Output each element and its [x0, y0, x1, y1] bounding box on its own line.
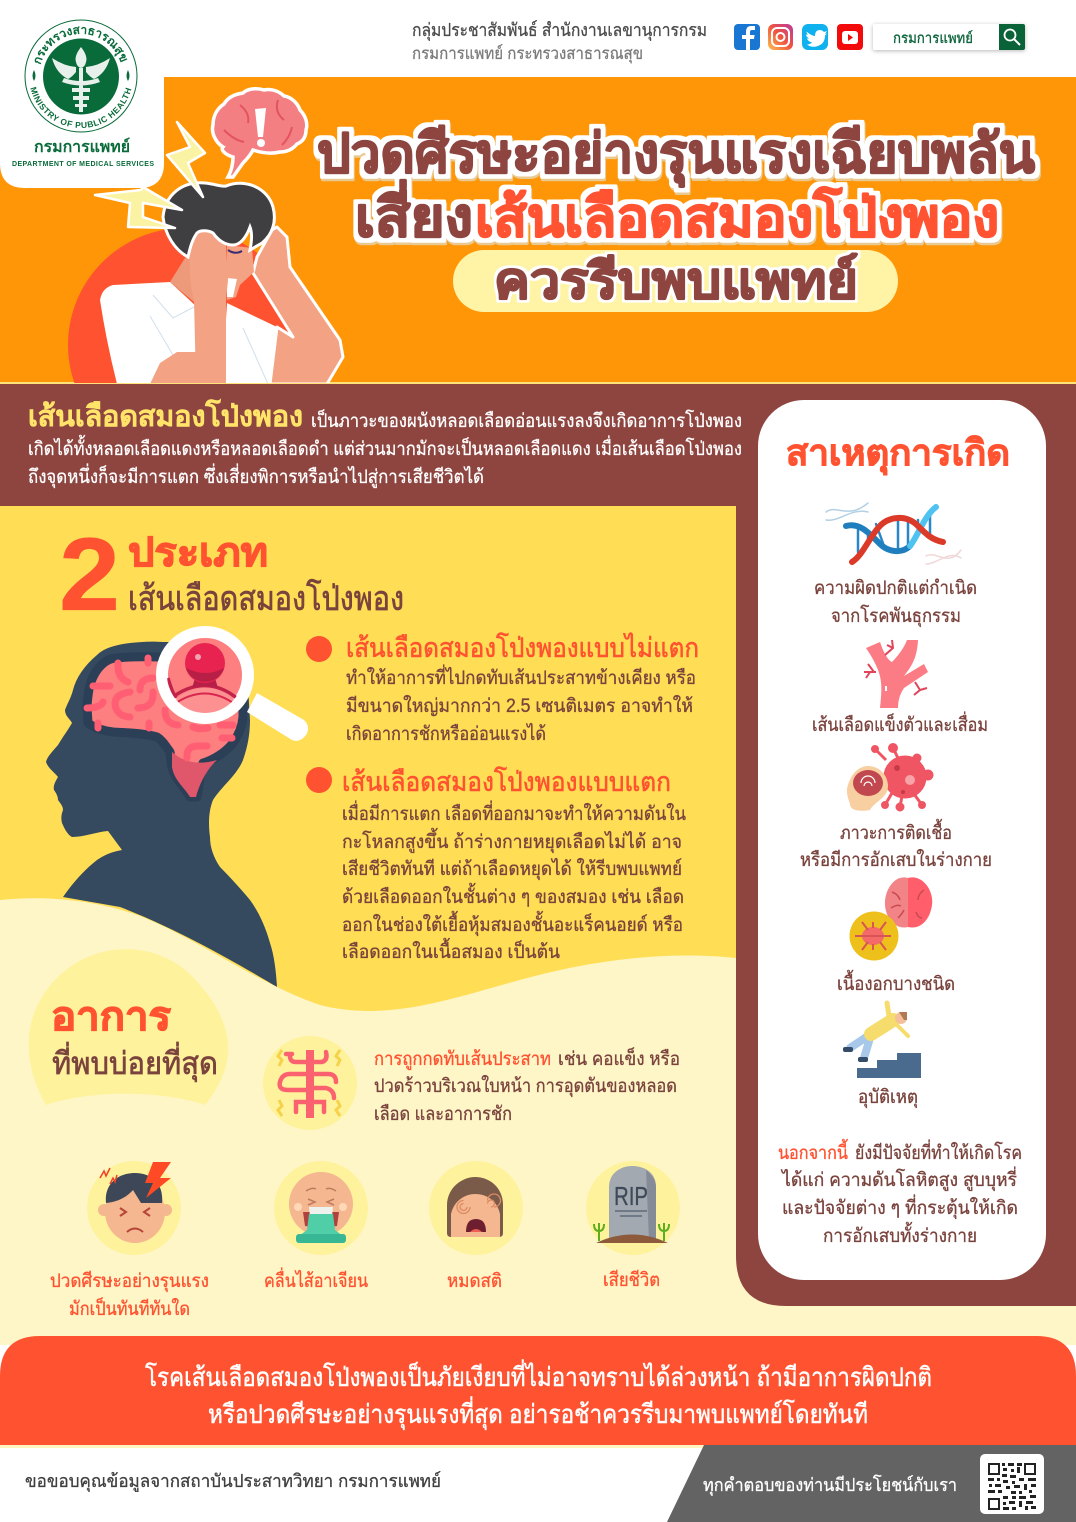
panel: brown causes background	[736, 500, 1076, 1306]
symptom: severe headache: มักเป็นทันทีทันใด	[69, 1296, 190, 1320]
title: เสี่ยง	[355, 179, 473, 248]
header text: กลุ่มประชาสัมพันธ์ สำนักงานเลขานุการกรม	[412, 20, 707, 41]
panel: brown heading band	[0, 384, 1076, 506]
header text: กรมการแพทย์ กระทรวงสาธารณสุข	[412, 44, 643, 64]
head silhouette	[46, 642, 277, 987]
symptom: loss of consciousness	[429, 1161, 523, 1292]
bullet: unruptured aneurysm: เกิดอาการชักหรืออ่อนแรงได้	[346, 723, 546, 745]
bullet: ruptured aneurysm: เสียชีวิตทันที แต่ถ้าเลือดหยุดได้ ให้รีบพบแพทย์	[342, 858, 682, 881]
label: accident: อุบัติเหตุ	[858, 1087, 918, 1109]
logo seal	[24, 20, 138, 132]
icon: facebook	[734, 24, 760, 50]
icon: youtube	[837, 24, 863, 50]
label: เสียชีวิต	[603, 1269, 660, 1291]
definition text: เส้นเลือดสมองโป่งพอง	[28, 398, 303, 433]
heading: 2 types: เส้นเลือดสมองโป่งพอง	[128, 579, 404, 618]
icon: artery	[864, 640, 928, 708]
bullet: unruptured aneurysm	[306, 633, 699, 745]
left arm and hand	[190, 231, 228, 384]
logo seal: MINISTRY OF PUBLIC HEALTH	[30, 86, 132, 128]
callout: warning band: โรคเส้นเลือดสมองโป่งพองเป็นภัยเงียบที่ไม่อาจทราบได้ล่วงหน้า ถ้ามีอาการผิดปกติ	[145, 1359, 932, 1392]
symptom: nausea and vomiting	[264, 1161, 368, 1292]
brain folds	[87, 658, 233, 758]
magnifier ring	[162, 632, 248, 718]
aneurysm in lens	[167, 643, 237, 713]
text: other factors: การอักเสบทั้งร่างกาย	[823, 1222, 977, 1247]
text: symptom description: เช่น คอแข็ง หรือ	[558, 1046, 680, 1070]
text: symptom description: เลือด และอาการชัก	[374, 1104, 512, 1125]
illustration: person with headache	[68, 87, 344, 383]
symptom: severe headache	[50, 1161, 209, 1320]
label: hardening: เส้นเลือดแข็งตัวและเสื่อม	[812, 711, 988, 736]
label: infection: ภาวะการติดเชื้อ	[840, 819, 952, 844]
heading: 2 types: ประเภท	[128, 531, 268, 575]
red circle behind person	[68, 230, 288, 383]
bullet: ruptured aneurysm: ออกในช่องใต้เยื้อหุ้มสมองชั้นอะแร็คนอยด์ หรือ	[342, 911, 683, 937]
definition text	[28, 398, 742, 489]
title: เส้นเลือดสมองโป่งพอง	[475, 186, 999, 248]
bullet: unruptured aneurysm: มีขนาดใหญ่มากกว่า 2.5 เซนติเมตร อาจทำให้	[346, 695, 693, 717]
icon: nerve compression	[263, 1036, 357, 1130]
icon: twitter	[802, 24, 828, 50]
icon: tumour	[850, 877, 932, 960]
brain stem	[172, 752, 217, 797]
logo emblem	[52, 47, 110, 112]
heading: symptoms: ที่พบบ่อยที่สุด	[52, 1042, 218, 1083]
magnifier handle	[247, 693, 308, 741]
QR code	[980, 1454, 1044, 1514]
shirt	[100, 282, 277, 384]
search box	[873, 24, 1025, 50]
logo panel: DEPARTMENT OF MEDICAL SERVICES	[12, 161, 154, 168]
text: other factors: ยังมีปัจจัยที่ทำให้เกิดโรค	[855, 1139, 1022, 1164]
panel: yellow types section	[0, 506, 736, 1026]
illustration: head silhouette with magnifier	[46, 632, 308, 987]
header text	[412, 20, 707, 64]
callout: warning band: หรือปวดศีรษะอย่างรุนแรงที่สุด อย่ารอช้าควรรีบมาพบแพทย์โดยทันที	[208, 1396, 868, 1430]
heading: symptoms: อาการ	[51, 995, 172, 1039]
label: ปวดศีรษะอย่างรุนแรง	[50, 1270, 209, 1293]
symptom: death	[586, 1161, 680, 1291]
panel: cream symptoms section	[0, 898, 1076, 1345]
chest skin	[150, 352, 196, 383]
icon: DNA	[826, 503, 961, 564]
text: symptom description: ปวดร้าวบริเวณใบหน้า การอุดตันของหลอด	[374, 1075, 677, 1098]
title: ปวดศีรษะอย่างรุนแรงเฉียบพลัน	[317, 124, 1035, 188]
title pill	[453, 250, 898, 312]
footer: credit	[0, 1445, 706, 1492]
icon: infection	[847, 744, 933, 811]
right arm	[253, 227, 343, 384]
label: tumour: เนื้องอกบางชนิด	[837, 970, 955, 995]
panel: causes	[758, 400, 1046, 1280]
hair	[163, 183, 274, 257]
bullet: unruptured aneurysm: เส้นเลือดสมองโป่งพองแบบไม่แตก	[346, 633, 699, 663]
panel: orange hero banner	[0, 77, 1076, 384]
footer: credit: ขอขอบคุณข้อมูลจากสถาบันประสาทวิทยา กรมการแพทย์	[25, 1471, 441, 1492]
icon: vomiting	[274, 1161, 368, 1255]
icon: accident fall	[843, 1003, 921, 1078]
logo panel	[0, 20, 164, 188]
text: other factors: ได้แก่ ความดันโลหิตสูง สูบบุหรี่	[780, 1166, 1017, 1192]
neck	[170, 258, 194, 302]
bullet: ruptured aneurysm: เส้นเลือดสมองโป่งพองแบบแตก	[342, 767, 671, 797]
definition text: เกิดได้ทั้งหลอดเลือดแดงหรือหลอดเลือดดำ แต่ส่วนมากมักจะเป็นหลอดเลือดแดง เมื่อเส้นเลือดโป่งพอง	[28, 435, 742, 460]
icon: headache	[87, 1161, 181, 1255]
label: คลื่นไส้อาเจียน	[264, 1267, 368, 1292]
footer: grey survey band	[667, 1445, 1076, 1522]
logo name: กรมการแพทย์	[34, 137, 130, 156]
label: congenital: ความผิดปกติแต่กำเนิด	[814, 578, 977, 599]
bullet: unruptured aneurysm: ทำให้อาการที่ไปกดทับเส้นประสาทข้างเคียง หรือ	[346, 664, 696, 689]
brain	[87, 657, 243, 797]
heading: causes: สาเหตุการเกิด	[786, 432, 1010, 476]
definition text: เป็นภาวะของผนังหลอดเลือดอ่อนแรงลงจึงเกิดอาการโป่งพอง	[311, 408, 742, 432]
heading: 2 types	[59, 517, 404, 633]
bullet: ruptured aneurysm: เลือดออกในเนื้อสมอง เป็นต้น	[342, 938, 560, 963]
title: ควรรีบพบแพทย์	[494, 253, 858, 309]
bullet: ruptured aneurysm: กะโหลกสูงขึ้น ถ้าร่างกายหยุดเลือดไม่ได้ อาจ	[342, 828, 682, 854]
search box: กรมการแพทย์	[893, 30, 973, 47]
bullet: ruptured aneurysm: เมื่อมีการแตก เลือดที่ออกมาจะทำให้ความดันใน	[342, 800, 686, 825]
heading: symptoms	[29, 949, 228, 1105]
text: other factors: และปัจจัยต่าง ๆ ที่กระตุ้นให้เกิด	[782, 1194, 1018, 1220]
text: other factors	[778, 1139, 1022, 1247]
face	[227, 245, 254, 300]
lightning bolts	[95, 122, 205, 228]
heading: 2 types: 2	[59, 517, 120, 633]
title	[317, 124, 1035, 312]
panel: causes: หรือมีการอักเสบในร่างกาย	[800, 849, 992, 871]
label: หมดสติ	[447, 1271, 502, 1292]
definition text: ถึงจุดหนึ่งก็จะมีการแตก ซึ่งเสี่ยงพิการหรือนำไปสู่การเสียชีวิตได้	[28, 463, 484, 489]
panel: causes: จากโรคพันธุกรรม	[831, 604, 961, 628]
logo seal: กระทรวงสาธารณสุข	[34, 26, 128, 64]
icon: instagram	[768, 24, 793, 50]
closed eye	[228, 250, 242, 253]
text: symptom description	[374, 1046, 680, 1125]
text: symptom description: การถูกกดทับเส้นประสาท	[374, 1049, 551, 1070]
icon: RIP gravestone: RIP	[614, 1181, 648, 1211]
text: other factors: นอกจากนี้	[778, 1139, 848, 1164]
bullet: ruptured aneurysm	[306, 767, 686, 963]
callout: warning band	[0, 1336, 1076, 1445]
bullet: ruptured aneurysm: ด้วยเลือดออกในชั้นต่าง ๆ ของสมอง เช่น เลือด	[342, 883, 684, 908]
brain with exclamation mark	[212, 89, 307, 177]
icon: dizzy face	[429, 1161, 523, 1255]
footer: grey survey band: ทุกคำตอบของท่านมีประโยชน์กับเรา	[703, 1474, 957, 1496]
